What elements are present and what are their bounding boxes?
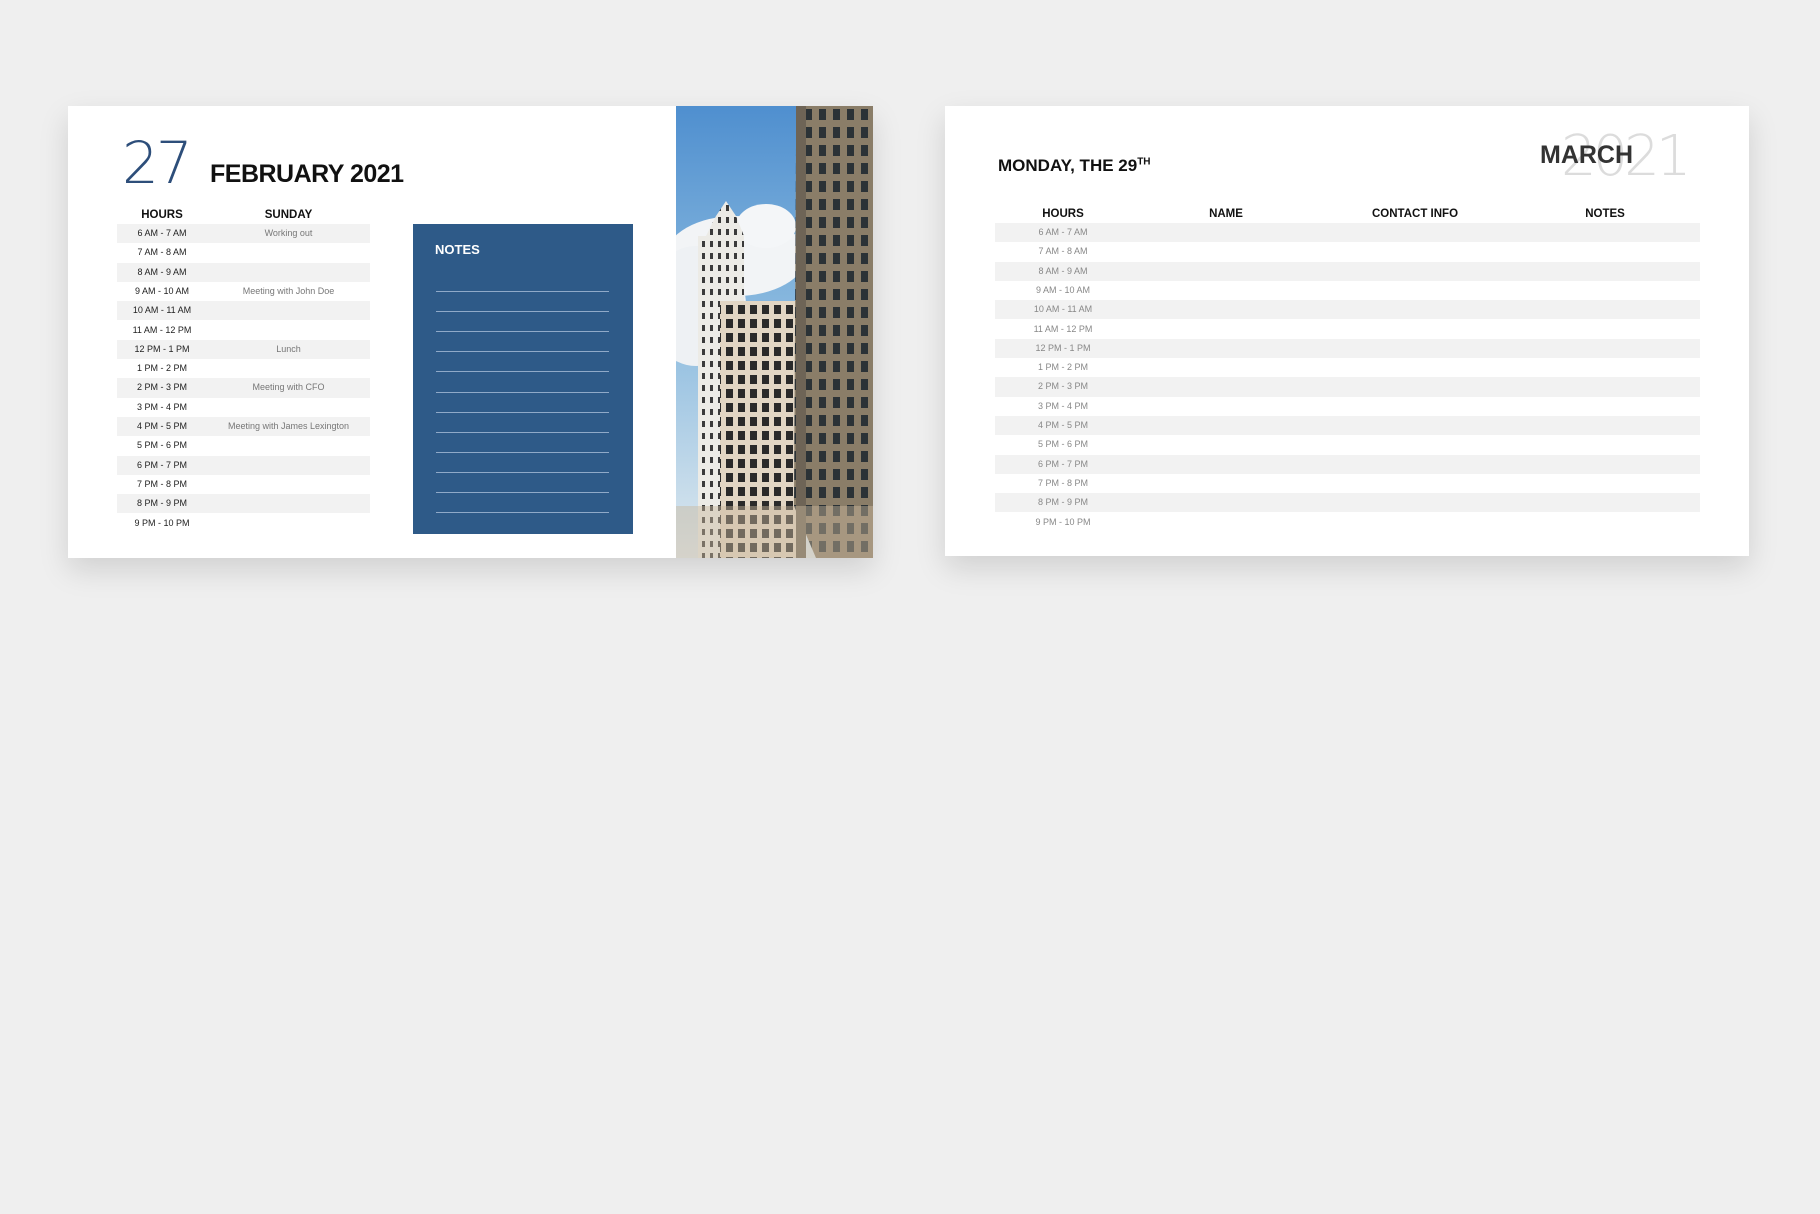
heading: monday the 29th: MONDAY, THE 29TH <box>998 156 1151 175</box>
contacts table: HOURS <box>1042 208 1084 220</box>
schedule table: 8 PM - 9 PM <box>137 498 187 508</box>
schedule table: HOURS <box>141 209 183 221</box>
schedule table: 8 AM - 9 AM <box>137 267 187 277</box>
heading: march: MARCH <box>1540 141 1633 169</box>
schedule table: 12 PM - 1 PM <box>134 344 190 354</box>
contacts table: 7 PM - 8 PM <box>1038 478 1088 488</box>
schedule table: 10 AM - 11 AM <box>133 305 191 315</box>
notes heading: NOTES <box>435 242 480 257</box>
contacts table: 11 AM - 12 PM <box>1034 324 1092 334</box>
contacts table: 7 AM - 8 AM <box>1038 246 1088 256</box>
contacts table <box>995 208 1700 526</box>
schedule table: Meeting with CFO <box>252 382 325 392</box>
contacts table: 1 PM - 2 PM <box>1038 362 1088 372</box>
schedule table: 7 AM - 8 AM <box>137 247 187 257</box>
year watermark 2021: 2021 <box>1561 124 1688 189</box>
schedule table: 3 PM - 4 PM <box>137 402 187 412</box>
contacts table: 9 AM - 10 AM <box>1036 285 1090 295</box>
panel: notes <box>413 224 633 534</box>
schedule table <box>117 209 370 528</box>
schedule table: 7 PM - 8 PM <box>137 479 187 489</box>
schedule table: 11 AM - 12 PM <box>133 324 191 334</box>
schedule table: Working out <box>265 228 312 238</box>
contacts table: 6 AM - 7 AM <box>1038 227 1088 237</box>
contacts table: CONTACT INFO <box>1372 208 1458 220</box>
contacts table: NAME <box>1209 208 1243 220</box>
contacts table: 10 AM - 11 AM <box>1034 304 1092 314</box>
schedule table: 4 PM - 5 PM <box>137 421 187 431</box>
contacts table: 8 PM - 9 PM <box>1038 497 1088 507</box>
contacts table: 8 AM - 9 AM <box>1038 266 1088 276</box>
schedule table: 9 AM - 10 AM <box>135 286 189 296</box>
schedule table: SUNDAY <box>265 209 312 221</box>
schedule table: 6 AM - 7 AM <box>137 228 187 238</box>
schedule table: Meeting with John Doe <box>243 286 334 296</box>
card: march daily contacts <box>945 106 1749 556</box>
contacts table: NOTES <box>1585 208 1625 220</box>
schedule table: Meeting with James Lexington <box>228 421 349 431</box>
schedule table: 6 PM - 7 PM <box>137 460 187 470</box>
photo: city buildings <box>676 106 873 558</box>
heading: february 2021: FEBRUARY 2021 <box>210 160 404 188</box>
schedule table: 1 PM - 2 PM <box>137 363 187 373</box>
contacts table: 3 PM - 4 PM <box>1038 401 1088 411</box>
contacts table: 5 PM - 6 PM <box>1038 439 1088 449</box>
date number 27: 27 <box>122 129 190 197</box>
schedule table: 5 PM - 6 PM <box>137 440 187 450</box>
card: february daily planner <box>68 106 873 558</box>
schedule table: 2 PM - 3 PM <box>137 382 187 392</box>
contacts table: 2 PM - 3 PM <box>1038 381 1088 391</box>
schedule table: 9 PM - 10 PM <box>134 518 190 528</box>
contacts table: 6 PM - 7 PM <box>1038 459 1088 469</box>
schedule table: Lunch <box>276 344 301 354</box>
contacts table: 12 PM - 1 PM <box>1035 343 1090 353</box>
contacts table: 9 PM - 10 PM <box>1035 516 1090 526</box>
contacts table: 4 PM - 5 PM <box>1038 420 1088 430</box>
